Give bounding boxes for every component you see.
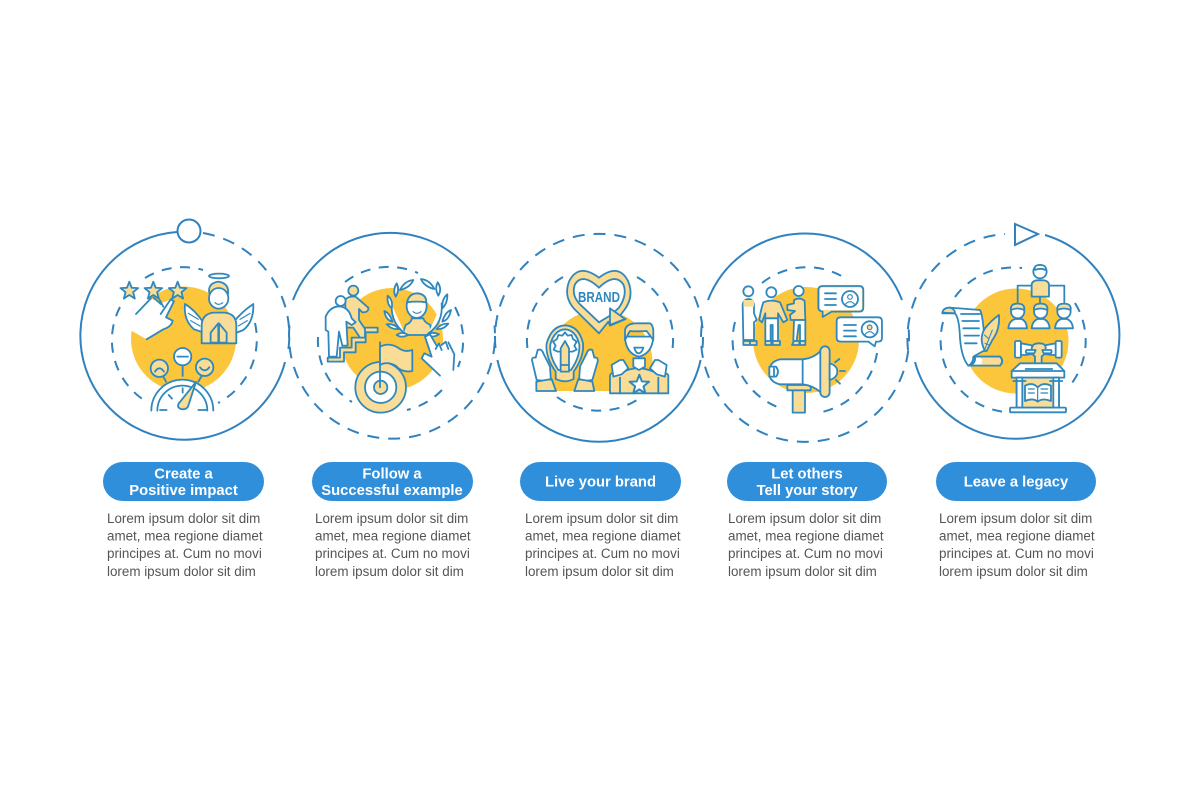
pill: let others tell your story [727, 462, 887, 501]
pill: follow a successful example: Follow a [362, 466, 422, 482]
icon: climbers, laurel, target and hand [326, 279, 455, 413]
yellow disc 3 [548, 310, 653, 391]
body text 2: principes at. Cum no movi [315, 546, 470, 561]
body text 1: amet, mea regione diamet [107, 528, 263, 544]
pill: live your brand: Live your brand [545, 474, 656, 490]
step 1: create a positive impact [80, 220, 289, 579]
icon: scroll, family tree, bust and book [942, 265, 1073, 412]
step 4: let others tell your story [701, 234, 909, 579]
pill: let others tell your story: Tell your story [757, 483, 858, 499]
pill: follow a successful example: Successful example [321, 483, 463, 499]
icon: brand heart, bulb and person [532, 271, 668, 393]
ring 1 [80, 220, 289, 440]
body text 5: lorem ipsum dolor sit dim [939, 564, 1088, 579]
body text 1: principes at. Cum no movi [107, 546, 262, 561]
icon: people, speech bubbles and megaphone [743, 286, 882, 413]
body text 4: lorem ipsum dolor sit dim [728, 564, 877, 579]
body text 5: principes at. Cum no movi [939, 546, 1094, 561]
body text 2: Lorem ipsum dolor sit dim [315, 511, 468, 526]
body text 5: Lorem ipsum dolor sit dim [939, 511, 1092, 526]
body text 4: principes at. Cum no movi [728, 546, 883, 561]
pill: create a positive impact [103, 462, 264, 501]
ring 5 [907, 224, 1119, 439]
pill: follow a successful example [312, 462, 473, 501]
ring 2 [289, 233, 495, 439]
ring 4 [701, 234, 909, 442]
step 2: follow a successful example [289, 233, 495, 579]
body text 3: principes at. Cum no movi [525, 546, 680, 561]
icon: brand heart, bulb and person: BRAND [578, 290, 620, 306]
yellow disc 5 [964, 288, 1068, 394]
pill: let others tell your story: Let others [771, 466, 843, 482]
body text 2: amet, mea regione diamet [315, 528, 471, 544]
body text 2: lorem ipsum dolor sit dim [315, 564, 464, 579]
ring 3 [495, 234, 703, 442]
step 5: leave a legacy [907, 224, 1119, 579]
yellow disc 4 [753, 287, 859, 393]
body text 4: amet, mea regione diamet [728, 528, 884, 544]
body text 1: lorem ipsum dolor sit dim [107, 564, 256, 579]
pill: create a positive impact: Positive impact [129, 483, 238, 499]
pill: leave a legacy [936, 462, 1096, 501]
body text 4: Lorem ipsum dolor sit dim [728, 511, 881, 526]
pill: live your brand [520, 462, 681, 501]
body text 5: amet, mea regione diamet [939, 528, 1095, 544]
body text 3: amet, mea regione diamet [525, 528, 681, 544]
pill: create a positive impact: Create a [154, 466, 213, 482]
body text 1: Lorem ipsum dolor sit dim [107, 511, 260, 526]
pill: leave a legacy: Leave a legacy [964, 474, 1069, 490]
icon: rating, angel and gauge [120, 274, 253, 411]
yellow disc 2 [341, 288, 443, 390]
yellow disc 1 [131, 286, 236, 392]
body text 3: lorem ipsum dolor sit dim [525, 564, 674, 579]
step 3: live your brand [495, 234, 703, 579]
body text 3: Lorem ipsum dolor sit dim [525, 511, 678, 526]
